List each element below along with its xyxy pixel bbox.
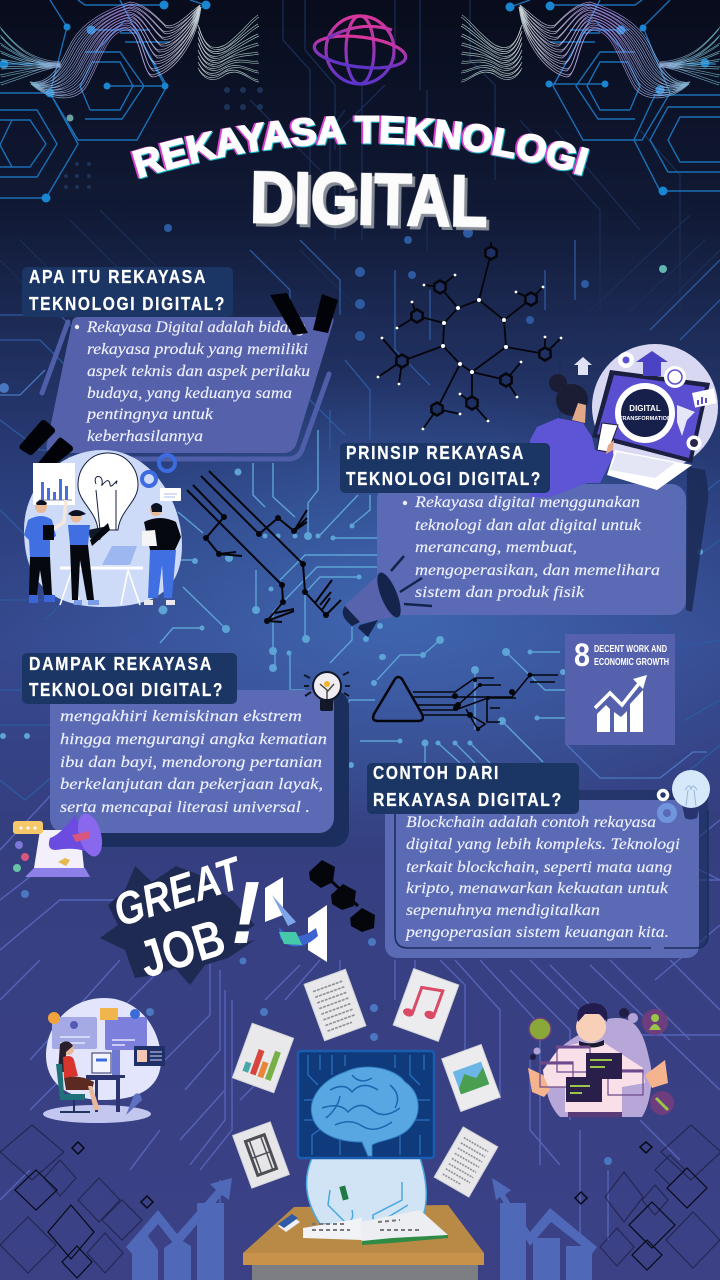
panel text: merancang, membuat, xyxy=(415,539,577,556)
laptop xyxy=(100,546,137,567)
title xyxy=(130,116,590,242)
decorative wave mesh right xyxy=(461,2,720,98)
growth chart xyxy=(595,675,647,732)
panel text xyxy=(75,319,310,445)
illustration: team with light bulb xyxy=(24,450,182,607)
heading: contoh: REKAYASA DIGITAL? xyxy=(373,789,563,810)
panel text: sistem dan produk fisik xyxy=(415,584,585,601)
person three xyxy=(142,503,181,605)
heading: apa itu: TEKNOLOGI DIGITAL? xyxy=(29,293,226,314)
illustration: digital transformation xyxy=(530,344,718,612)
panel text: pentingnya untuk xyxy=(86,406,214,423)
panel text: hingga mengurangi angka kematian xyxy=(60,731,327,748)
icon: megaphone and laptop xyxy=(13,811,106,877)
panel text: Blockchain adalah contoh rekayasa xyxy=(406,814,656,831)
great job badge xyxy=(100,846,260,989)
panel text xyxy=(60,708,327,816)
panel: dampak rekayasa xyxy=(50,690,349,847)
panel text: Rekayasa digital menggunakan xyxy=(414,494,640,511)
great job badge: JOB xyxy=(133,909,232,989)
illustration: paper text xyxy=(304,969,366,1041)
person two xyxy=(68,510,110,605)
sdg 8 card: DECENT WORK AND xyxy=(594,643,667,655)
icon: megaphone dark xyxy=(343,556,432,637)
tape strips xyxy=(20,293,338,464)
icon: light bulb xyxy=(304,672,350,711)
bulb xyxy=(78,453,138,540)
circuit traces mid xyxy=(160,430,567,763)
icon: black blockchain cubes xyxy=(309,860,375,932)
chart board xyxy=(33,463,75,505)
diamond pattern left xyxy=(0,1125,153,1278)
panel: apa itu rekayasa xyxy=(42,317,334,459)
bottom chart arrows xyxy=(126,1178,597,1280)
sdg 8 card: ECONOMIC GROWTH xyxy=(594,656,669,668)
illustration: digital transformation: TRANSFORMATION xyxy=(619,416,671,422)
icon: data transfer xyxy=(265,877,327,962)
panel: contoh rekayasa xyxy=(385,790,708,958)
panel text: kripto, menawarkan kekuatan untuk xyxy=(406,880,669,897)
black circuit: triangle xyxy=(373,672,558,731)
panel text: rekayasa produk yang memiliki xyxy=(87,341,308,358)
illustration: open book xyxy=(303,1210,448,1245)
illustration: circuit brain xyxy=(298,1051,434,1158)
illustration: writer body xyxy=(307,1158,426,1224)
icon: globe xyxy=(313,16,407,84)
gears xyxy=(142,455,175,486)
panel text: aspek teknis dan aspek perilaku xyxy=(87,363,310,380)
table xyxy=(60,568,143,605)
illustration: woman at desk xyxy=(43,998,165,1123)
sdg 8 card: 8 xyxy=(574,637,590,673)
heading: prinsip: PRINSIP REKAYASA xyxy=(346,442,525,463)
heading: dampak: TEKNOLOGI DIGITAL? xyxy=(29,679,224,700)
illustration: developer xyxy=(528,1003,674,1117)
panel text: terkait blockchain, seperti mata uang xyxy=(406,859,672,876)
panel text: teknologi dan alat digital untuk xyxy=(415,517,642,534)
panel text: budaya, yang keduanya sama xyxy=(87,385,292,402)
panel text xyxy=(403,494,660,601)
panel text: digital yang lebih kompleks. Teknologi xyxy=(406,836,680,853)
panel text: sepenuhnya mendigitalkan xyxy=(406,902,600,919)
decorative wave mesh left xyxy=(0,2,259,98)
panel text: pengoperasian sistem keuangan kita. xyxy=(405,924,669,941)
heading: contoh xyxy=(367,762,579,814)
great job badge: ! xyxy=(231,863,260,962)
heading: dampak: DAMPAK REKAYASA xyxy=(29,653,213,674)
heading: dampak xyxy=(22,653,237,704)
woman xyxy=(530,374,618,497)
great job badge: GREAT xyxy=(107,846,250,937)
panel text: berkelanjutan dan pekerjaan layak, xyxy=(60,776,323,793)
title: DIGITAL xyxy=(250,158,488,242)
panel text: mengakhiri kemiskinan ekstrem xyxy=(60,708,302,725)
black circuit: center lines xyxy=(187,471,341,624)
panel text: ibu dan bayi, mendorong pertanian xyxy=(60,754,322,771)
black circuit: molecule xyxy=(377,242,562,430)
illustration: paper music xyxy=(393,969,459,1041)
illustration: paper document xyxy=(434,1127,498,1197)
heading: apa itu: APA ITU REKAYASA xyxy=(29,266,207,287)
panel text xyxy=(405,814,680,941)
heading: prinsip xyxy=(340,442,550,493)
speech bubble xyxy=(160,488,181,501)
illustration: paper chart xyxy=(232,1023,294,1093)
sdg 8 card xyxy=(565,634,675,745)
illustration: desk xyxy=(243,1205,484,1280)
illustration: paper film xyxy=(233,1122,289,1188)
heading: apa itu xyxy=(22,266,233,317)
panel text: Rekayasa Digital adalah bidang xyxy=(86,319,305,336)
icon: bulb with gears xyxy=(658,770,710,820)
panel text: keberhasilannya xyxy=(87,428,203,445)
panel text: serta mencapai literasi universal . xyxy=(60,799,310,816)
person one xyxy=(24,500,66,603)
illustration: digital transformation: DIGITAL xyxy=(629,404,661,413)
panel text: mengoperasikan, dan memelihara xyxy=(415,562,660,579)
heading: prinsip: TEKNOLOGI DIGITAL? xyxy=(346,468,542,489)
heading: contoh: CONTOH DARI xyxy=(373,762,500,783)
diamond pattern right xyxy=(575,1125,720,1270)
title: REKAYASA TEKNOLOGI xyxy=(130,116,590,180)
panel: prinsip rekayasa xyxy=(377,484,686,615)
illustration: paper image xyxy=(442,1045,500,1111)
